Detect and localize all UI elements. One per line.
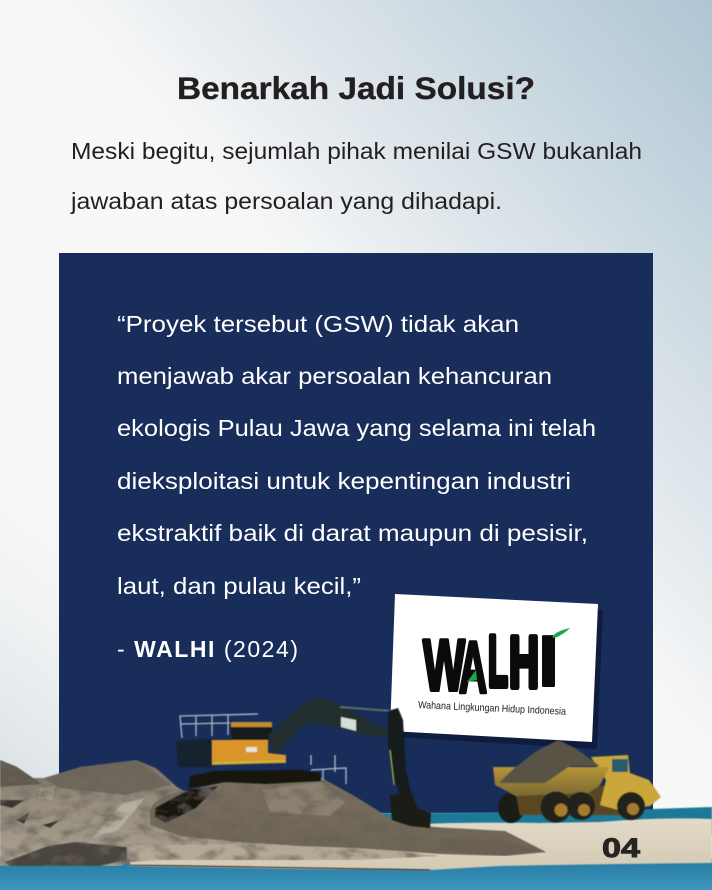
logo caption: Wahana Lingkungan Hidup Indonesia — [418, 700, 566, 718]
mound: left rock hill — [0, 760, 440, 866]
quote text: “Proyek tersebut (GSW) tidak akan — [117, 311, 519, 337]
truck wheels — [540, 792, 645, 822]
logo wordmark: W — [423, 626, 465, 706]
truck sand load — [499, 740, 600, 783]
excavator arm — [388, 708, 411, 795]
excavator boom — [268, 699, 392, 752]
intro text: Meski begitu, sejumlah pihak menilai GSW bukanlah — [71, 138, 642, 164]
quote text: laut, dan pulau kecil,” — [117, 573, 361, 599]
excavator railing — [180, 714, 346, 784]
excavator tracks — [189, 770, 321, 788]
quote text: dieksploitasi untuk kepentingan industri — [117, 468, 571, 494]
quote attribution: - WALHI (2024) — [117, 636, 298, 662]
quote text: ekstraktif baik di darat maupun di pesisir, — [117, 520, 588, 546]
truck cab — [591, 755, 661, 810]
truck dump bed — [493, 767, 609, 796]
excavator orange body — [212, 740, 286, 765]
page number: 04 — [602, 833, 640, 863]
excavator — [176, 699, 431, 828]
scene: sea and beach — [0, 807, 712, 890]
logo wordmark: H — [509, 623, 539, 703]
beach sand — [130, 818, 712, 870]
foreground water — [0, 858, 712, 890]
truck rear wheel — [498, 793, 524, 823]
logo card: WALHI — [390, 594, 603, 749]
excavator cab and top — [230, 722, 272, 741]
title: Benarkah Jadi Solusi? — [177, 70, 535, 106]
quote text: ekologis Pulau Jawa yang selama ini telah — [117, 415, 596, 441]
shoreline dark line — [130, 865, 430, 870]
logo wordmark: I — [538, 622, 559, 702]
panel: quote background — [59, 253, 653, 813]
truck chassis — [515, 785, 620, 815]
mound: central sand pile — [150, 777, 546, 856]
intro text: jawaban atas persoalan yang dihadapi. — [70, 188, 502, 214]
logo wordmark: A — [459, 628, 487, 708]
excavator counterweight — [176, 739, 212, 767]
intro text — [70, 138, 642, 214]
logo wordmark — [423, 622, 559, 708]
quote text: menjawab akar persoalan kehancuran — [117, 363, 552, 389]
background sea — [379, 807, 712, 835]
logo green accents — [467, 628, 570, 682]
quote text — [117, 311, 596, 599]
logo wordmark: L — [488, 622, 508, 702]
dump truck — [493, 740, 661, 823]
excavator bucket — [390, 793, 431, 828]
